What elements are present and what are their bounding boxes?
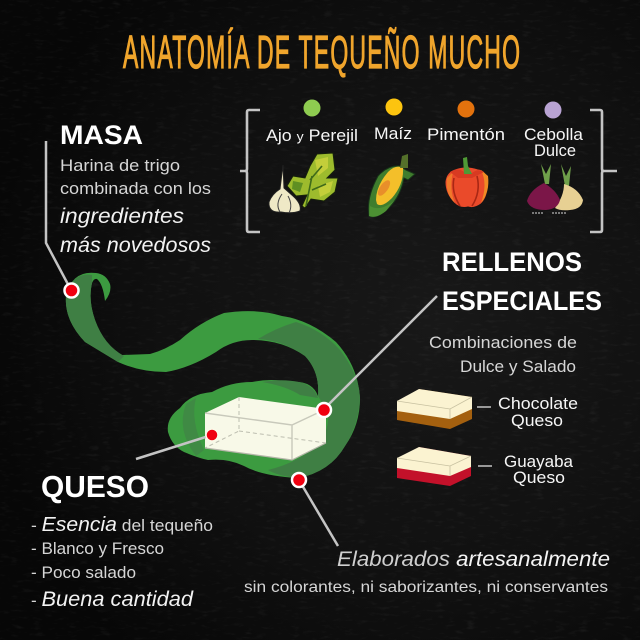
flavour: ajo y perejil: Ajo y Perejil: [266, 127, 358, 145]
connector: elaborados: [299, 480, 338, 546]
text block: elaborados artesanalmente: Elaborados artesanalmente: [337, 548, 610, 571]
text block: queso list: - Blanco y Fresco: [31, 540, 164, 558]
left bracket: [240, 110, 260, 232]
icon: garlic and parsley: [269, 153, 338, 213]
text block: combinaciones: Dulce y Salado: [460, 358, 576, 376]
marker: elaborados: [292, 473, 306, 487]
label: guayaba queso: Queso: [513, 469, 565, 487]
label: guayaba queso: Guayaba: [504, 453, 574, 471]
title: ANATOMÍA DE TEQUEÑO MUCHO: [123, 26, 520, 78]
icon: guava cheese block: [397, 447, 471, 486]
connector: rellenos: [324, 296, 437, 409]
text block: queso list: [31, 514, 213, 611]
heading: queso: QUESO: [41, 469, 149, 504]
text block: elaborados artesanalmente: sin colorantes, ni saborizantes, ni conservantes: [244, 579, 608, 596]
flavour: ajo y perejil: [266, 100, 358, 213]
label: chocolate queso: [477, 395, 578, 430]
icon: corn: [368, 154, 415, 217]
marker: rellenos: [317, 403, 331, 417]
text block: masa description: ingredientes: [60, 205, 185, 228]
text block: elaborados artesanalmente: [244, 548, 610, 596]
dough shaded wrap: [262, 380, 318, 398]
icon: red pepper: [445, 157, 488, 208]
panel: flavours bracket: [240, 98, 617, 232]
heading: masa: MASA: [60, 120, 143, 150]
flavour: cebolla dulce: Dulce: [534, 142, 576, 160]
marker: queso: [206, 429, 218, 441]
connector: queso: [136, 435, 212, 459]
text block: queso list: - Poco salado: [31, 564, 136, 582]
heading: rellenos especiales: [442, 247, 602, 316]
panel: queso: [31, 469, 213, 611]
flavour: pimenton: Pimentón: [427, 126, 505, 144]
text block: masa description: Harina de trigo: [60, 157, 180, 175]
dough shaded curl: [66, 275, 124, 362]
label: chocolate queso: Queso: [511, 412, 563, 430]
panel: rellenos especiales: [397, 247, 602, 487]
marker: masa: [64, 284, 78, 298]
dough shaded inner band: [258, 322, 360, 478]
flavour: cebolla dulce: [524, 102, 584, 213]
label: chocolate queso: Chocolate: [498, 395, 578, 413]
connector: masa: [46, 141, 71, 290]
panel: masa text: [60, 120, 212, 257]
text block: queso list: - Esencia del tequeño: [31, 514, 213, 536]
text block: masa description: combinada con los: [60, 180, 211, 198]
flavour: pimenton: [427, 100, 505, 208]
text block: combinaciones: Combinaciones de: [429, 334, 577, 352]
text block: masa description: [60, 157, 212, 257]
dough ribbon back: [66, 273, 360, 478]
icon: onions: [527, 164, 583, 213]
illustration: tequeño dough and cheese: [66, 273, 360, 478]
icon: chocolate cheese block: [397, 389, 472, 429]
heading: rellenos especiales: RELLENOS: [442, 247, 582, 277]
cheese block: [205, 397, 326, 460]
label: guayaba queso: [478, 453, 574, 487]
heading: rellenos especiales: ESPECIALES: [442, 286, 602, 316]
text block: combinaciones: [429, 334, 577, 376]
text block: queso list: - Buena cantidad: [31, 588, 194, 611]
right bracket: [590, 110, 617, 232]
flavour: maiz: [368, 98, 415, 217]
flavour: cebolla dulce: Cebolla: [524, 126, 584, 144]
flavour: maiz: Maíz: [374, 125, 412, 143]
text block: masa description: más novedosos: [60, 234, 212, 257]
